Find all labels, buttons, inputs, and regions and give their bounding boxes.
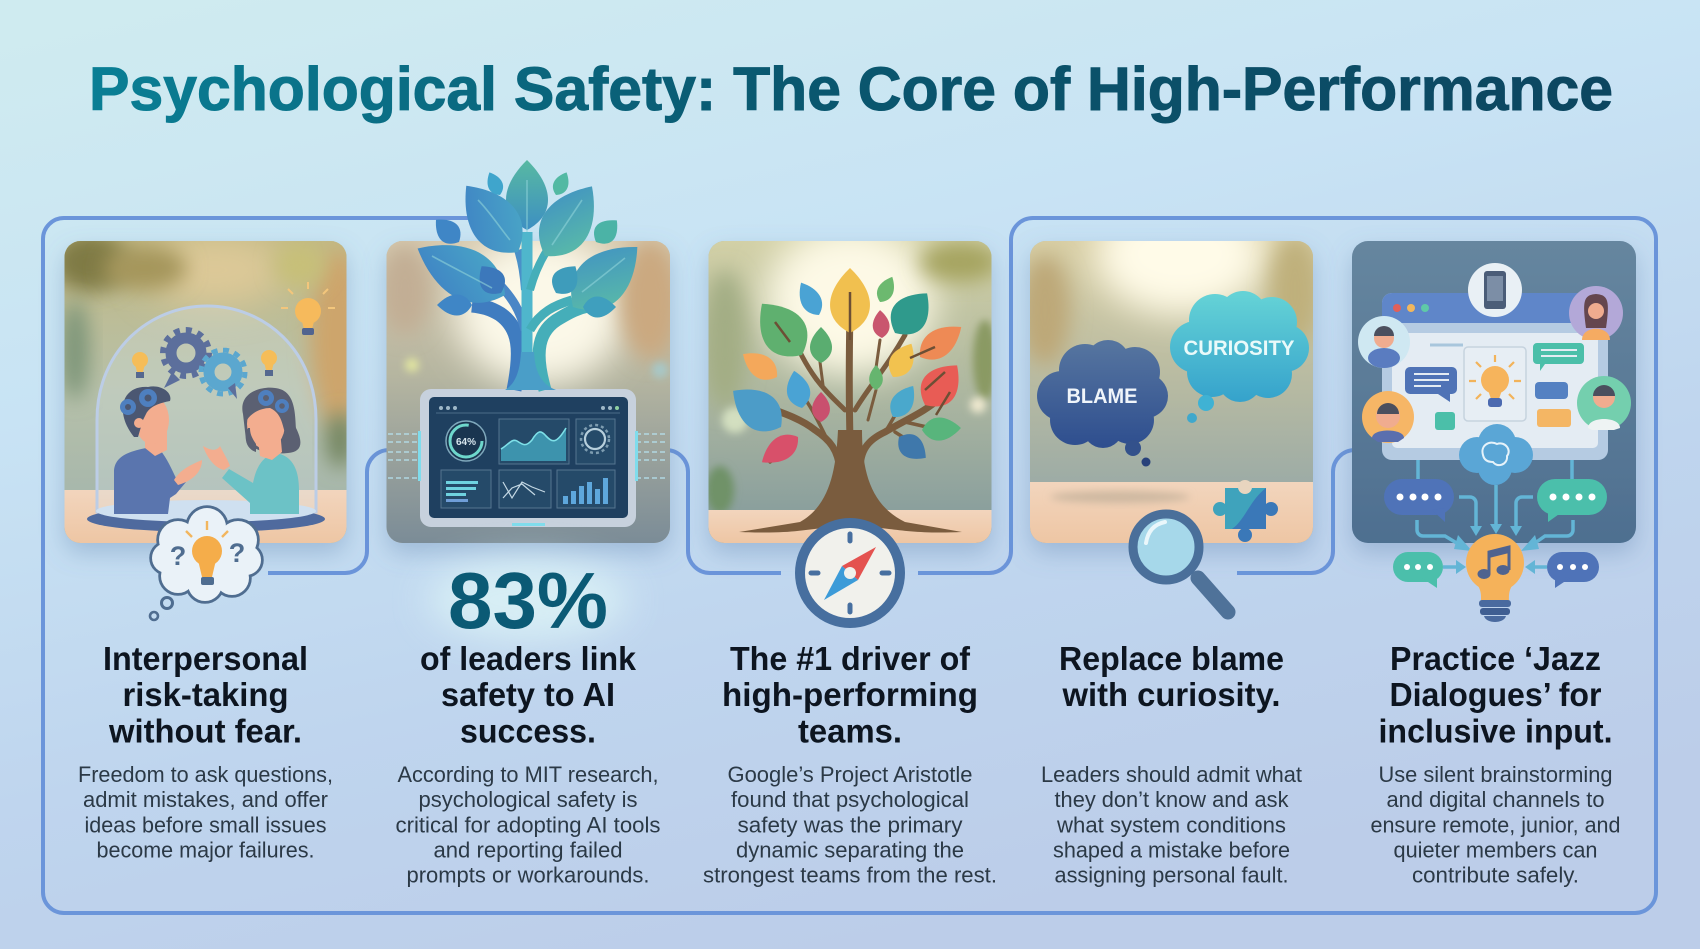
tree trunk and branches	[758, 310, 940, 470]
panel: interpersonal risk-taking	[52, 232, 366, 862]
icon: curiosity cloud: CURIOSITY	[1184, 337, 1294, 360]
chat bubbles with dots	[1384, 479, 1607, 588]
body text: assigning personal fault.	[1054, 862, 1288, 888]
body text: admit mistakes, and offer	[83, 787, 328, 812]
body text	[703, 762, 997, 888]
body text: According to MIT research,	[398, 762, 658, 787]
body text: quieter members can	[1394, 838, 1598, 862]
icon: thought bubble with bulb	[150, 507, 262, 620]
icon: blame cloud: BLAME	[1066, 385, 1138, 408]
body text: prompts or workarounds.	[406, 862, 650, 888]
icon: magnifying glass	[1133, 514, 1228, 612]
body text: contribute safely.	[1412, 862, 1579, 888]
arrow heads	[1454, 524, 1539, 574]
heading: safety to AI	[441, 676, 615, 713]
icon: compass	[800, 523, 900, 623]
avatars	[1358, 263, 1631, 443]
body text: critical for adopting AI tools	[396, 812, 660, 838]
heading	[420, 640, 637, 750]
connector line: card 4 to card 5	[1237, 450, 1355, 573]
panel: jazz dialogues	[1352, 241, 1636, 888]
heading: without fear.	[108, 712, 302, 750]
body text	[78, 762, 333, 862]
icon: outer light bulb	[281, 282, 335, 335]
woman	[203, 388, 300, 514]
heading: of leaders link	[420, 640, 637, 677]
illustration card: colourful tree	[703, 225, 1000, 543]
body text: and digital channels to	[1386, 787, 1604, 812]
heading: Dialogues’ for	[1390, 676, 1602, 713]
heading: with curiosity.	[1062, 676, 1280, 713]
illustration card: dark slate backdrop	[1352, 241, 1636, 543]
icon: thought bubble with bulb: ?	[170, 541, 186, 571]
man	[114, 386, 202, 514]
body text: safety was the primary	[738, 812, 962, 838]
body text: Use silent brainstorming	[1378, 762, 1612, 787]
heading: high-performing	[722, 676, 978, 713]
body text: ideas before small issues	[84, 812, 326, 838]
body text: strongest teams from the rest.	[703, 862, 997, 888]
glass dome	[97, 306, 316, 512]
body text	[396, 762, 660, 888]
body text: ensure remote, junior, and	[1370, 812, 1620, 838]
heading	[103, 640, 308, 750]
heading: Practice ‘Jazz	[1390, 640, 1601, 677]
flow lines and arrows	[1417, 460, 1573, 567]
heading: teams.	[798, 712, 902, 750]
heading	[1059, 640, 1284, 713]
icon: light bulb with music note	[1466, 534, 1524, 622]
panel: number one driver	[703, 225, 1000, 888]
body text: shaped a mistake before	[1053, 838, 1290, 862]
body text: become major failures.	[96, 838, 314, 862]
body text: what system conditions	[1056, 812, 1286, 838]
icon: thought bubble with bulb: ?	[229, 538, 245, 568]
tablet dashboard	[388, 389, 668, 527]
icon: cloud with brain	[1459, 424, 1533, 485]
body text: Google’s Project Aristotle	[728, 762, 972, 787]
illustration card: tree growing from dashboard	[380, 235, 680, 543]
dome base	[87, 500, 325, 532]
body text: found that psychological	[731, 787, 969, 812]
browser window	[1382, 293, 1608, 460]
icon: curiosity cloud	[1170, 291, 1309, 423]
tree leaves	[722, 268, 971, 472]
connector line: frame	[43, 218, 1656, 913]
heading	[722, 640, 978, 750]
body text: psychological safety is	[418, 787, 638, 812]
title: Psychological Safety: The Core of High-Performance	[89, 55, 1613, 123]
heading: inclusive input.	[1378, 712, 1612, 750]
heading	[1378, 640, 1612, 750]
body text: Leaders should admit what	[1041, 762, 1302, 787]
statistic: 83%: 83%	[448, 556, 608, 645]
panel: replace blame with curiosity	[1020, 195, 1320, 888]
body text	[1370, 762, 1620, 888]
heading: risk-taking	[122, 676, 288, 713]
connector line: card 1 to card 2	[268, 450, 393, 573]
heading: Interpersonal	[103, 640, 308, 677]
body text: and reporting failed	[434, 838, 622, 862]
illustration card: people under glass dome	[52, 232, 366, 620]
connector line: card 2 to card 3	[666, 450, 781, 573]
body text: Freedom to ask questions,	[78, 762, 333, 787]
heading: Replace blame	[1059, 640, 1284, 677]
gears	[163, 330, 245, 399]
tablet dashboard: 64%	[456, 437, 476, 448]
icon: blame cloud	[1037, 340, 1168, 466]
body text: they don’t know and ask	[1054, 787, 1289, 812]
body text	[1041, 762, 1302, 888]
small bulbs	[132, 350, 277, 378]
panel: 83 percent statistic	[380, 160, 680, 888]
illustration card: sunlit backdrop	[1020, 195, 1320, 543]
heading: The #1 driver of	[730, 640, 971, 677]
icon: blue-green tree	[406, 160, 655, 390]
heading: success.	[460, 712, 596, 750]
icon: puzzle piece	[1213, 480, 1278, 542]
body text: dynamic separating the	[736, 838, 964, 862]
